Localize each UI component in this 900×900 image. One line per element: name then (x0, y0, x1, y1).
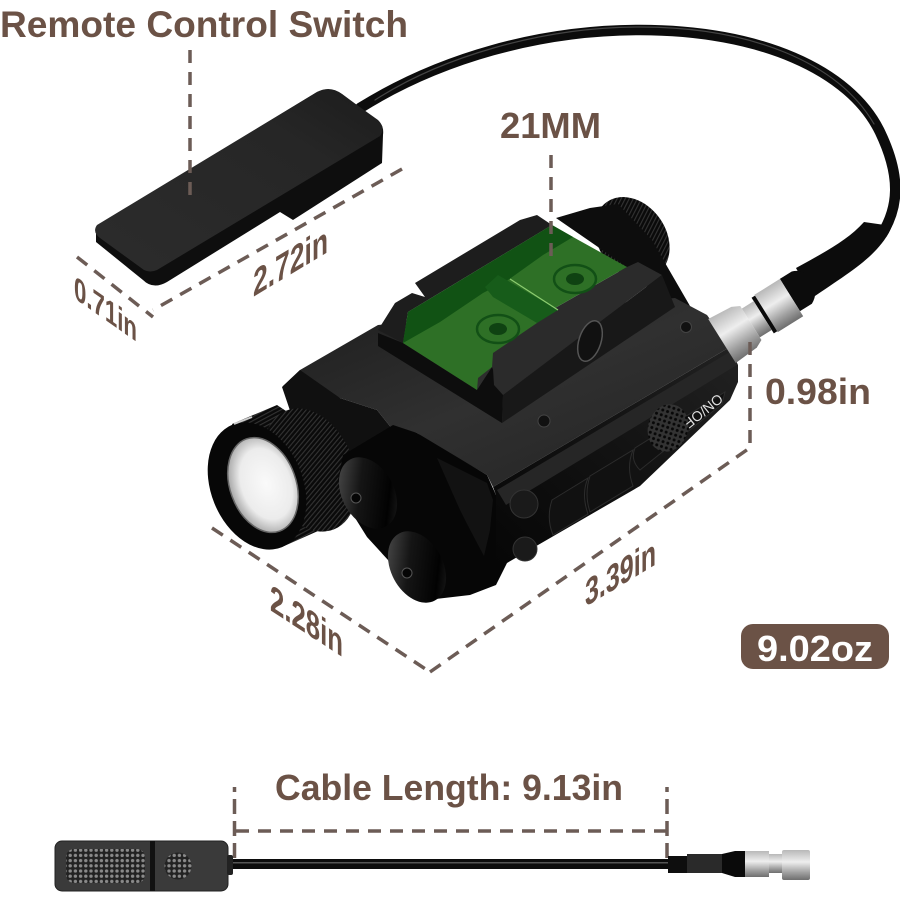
dimension: cable length bracket (234, 787, 667, 858)
weight badge 9.02oz: 9.02oz (757, 628, 873, 669)
selector knob with ON/OFF marking: ON/OF (681, 391, 726, 431)
label: 21MM rail width: 21MM (500, 105, 601, 146)
dashed leader: remote control switch (188, 50, 192, 204)
body side face (493, 347, 738, 585)
rail screws (477, 265, 596, 343)
dimension: remote width 2.72in: 2.72in (253, 218, 328, 305)
small body screws (538, 322, 692, 427)
connector: metal plug (708, 262, 827, 363)
cross pin (485, 275, 558, 323)
remote switch: top view (55, 841, 233, 891)
flashlight product drawing (190, 182, 827, 613)
dimension: width 2.28in: 2.28in (270, 575, 343, 666)
dimension: height 0.98in: 0.98in (765, 371, 871, 412)
mount bolt (573, 318, 607, 364)
dimension: remote depth 0.71in (74, 257, 153, 349)
flashlight neck (282, 370, 395, 500)
dimension: height 0.98in (750, 342, 871, 447)
weight badge 9.02oz (741, 624, 889, 669)
remote control switch pad (95, 89, 383, 286)
dimension: length 3.39in (430, 447, 751, 672)
green rail channel (403, 225, 627, 390)
flashlight lens (215, 428, 311, 542)
label: cable length: Cable Length: 9.13in (275, 767, 623, 808)
dimension: width 2.28in (212, 528, 430, 672)
selector knob with ON/OFF marking (642, 391, 726, 457)
laser window cones (327, 447, 458, 613)
picatinny rail mount (378, 215, 675, 423)
dimension: remote depth 0.71in: 0.71in (74, 268, 137, 349)
front lower housing (338, 425, 496, 600)
side adjustment screws (510, 490, 538, 561)
rear knurled cap (556, 182, 690, 306)
dimension: remote width 2.72in (153, 169, 402, 310)
heading: remote control switch: Remote Control Switch (0, 4, 408, 45)
connector: straight view (668, 850, 810, 880)
body top face (283, 298, 730, 487)
dimension: length 3.39in: 3.39in (585, 530, 656, 615)
cable: remote switch to light (360, 27, 895, 298)
cable: straight view (226, 859, 672, 869)
knurled bezel ring (190, 394, 375, 564)
